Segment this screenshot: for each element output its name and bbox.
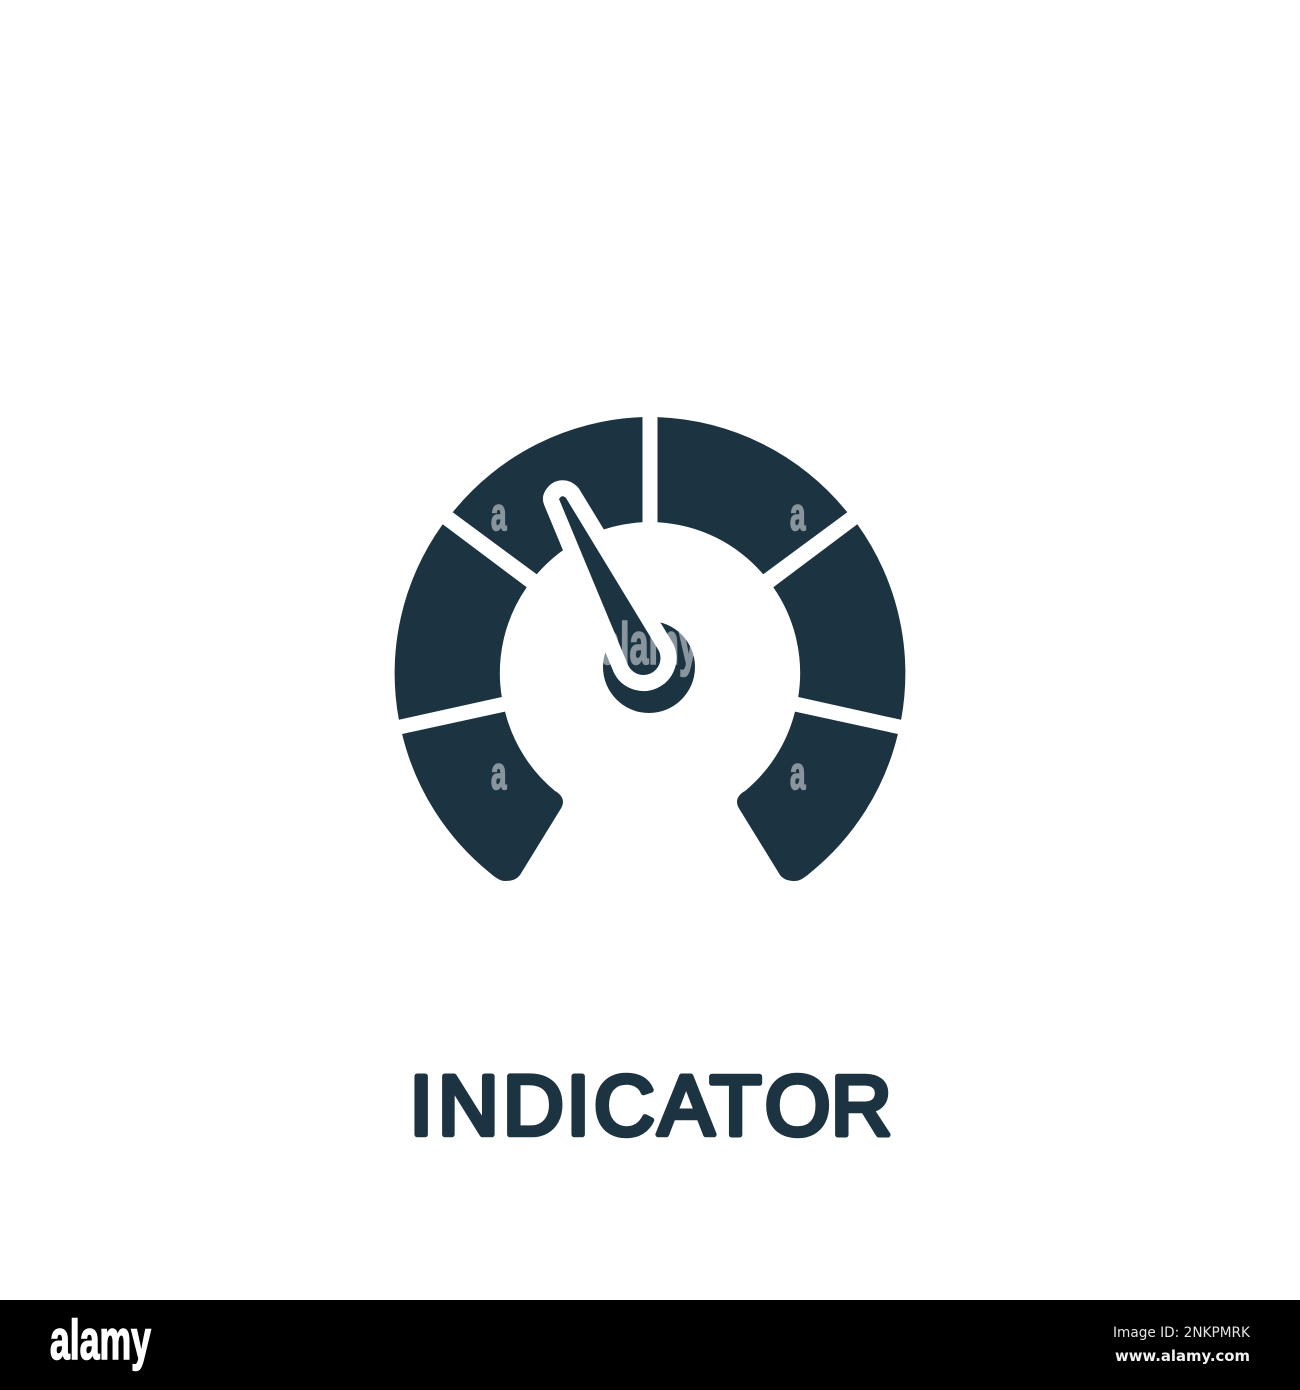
gauge segment: lower right	[737, 712, 898, 881]
gauge segment: upper left	[453, 417, 642, 574]
gauge segment: middle right	[773, 524, 905, 720]
watermark: repeated letters and logo over the gauge: alamy	[601, 611, 698, 677]
gauge segment: lower left	[402, 712, 563, 881]
footer logo: alamy	[50, 1308, 151, 1371]
title: INDICATOR	[410, 1058, 892, 1152]
gauge needle with white halo	[559, 496, 661, 675]
watermark: repeated letters and logo over the gauge	[491, 488, 806, 799]
gauge hub	[603, 621, 695, 713]
watermark: repeated letters and logo over the gauge: a	[790, 747, 806, 799]
watermark: repeated letters and logo over the gauge: a	[491, 747, 507, 799]
gauge segment: upper right	[658, 417, 847, 574]
watermark: repeated letters and logo over the gauge: a	[491, 488, 507, 540]
website: www.alamy.com	[1115, 1347, 1250, 1365]
image id: Image ID: 2NKPMRK	[1113, 1325, 1251, 1341]
watermark: repeated letters and logo over the gauge: a	[790, 488, 806, 540]
footer bar	[0, 1300, 1300, 1390]
icon: speedometer gauge	[395, 417, 905, 881]
gauge segment: middle left	[395, 524, 527, 720]
